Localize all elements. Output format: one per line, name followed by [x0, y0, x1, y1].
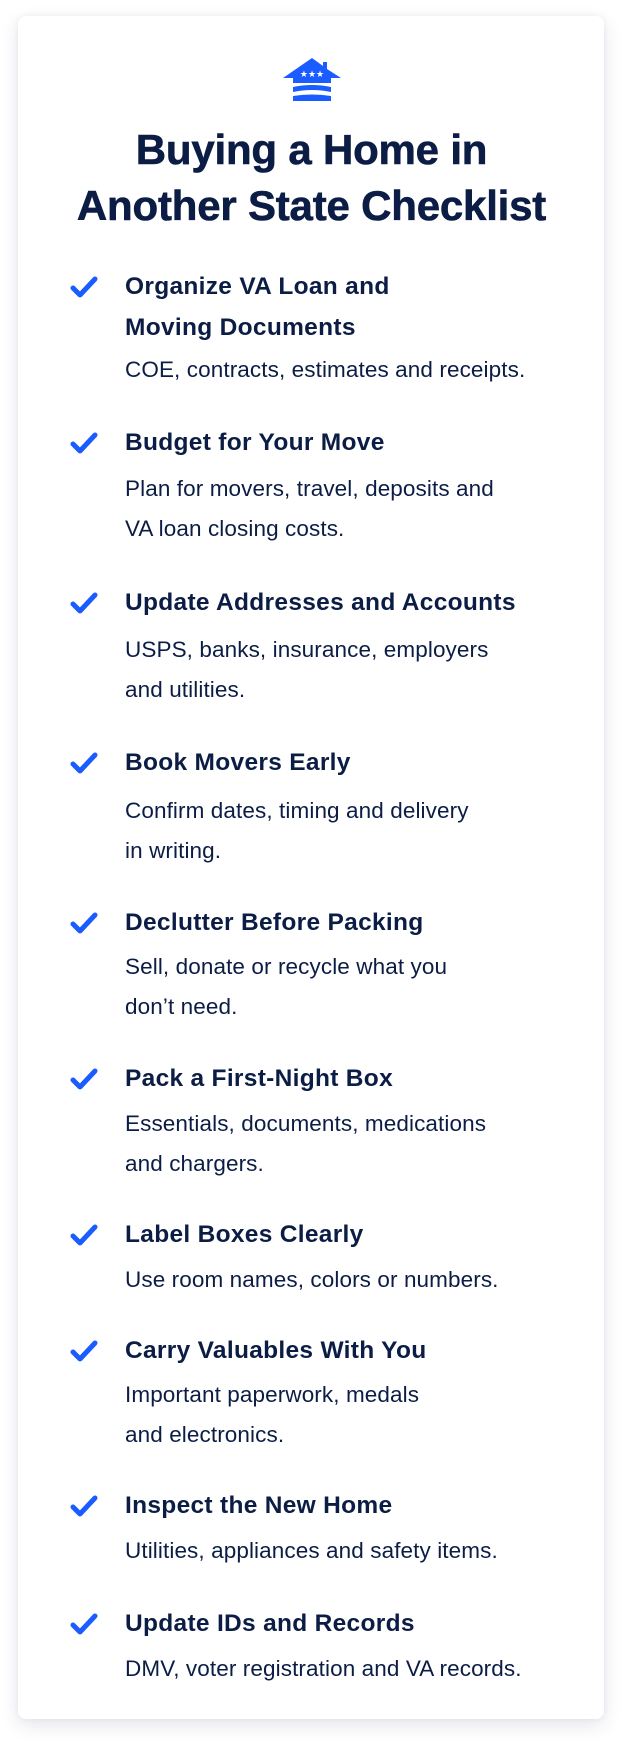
text: USPS, banks, insurance, employers: [125, 637, 488, 662]
text: and utilities.: [125, 677, 245, 702]
icon: house logo: ★★★: [300, 70, 324, 80]
item 7: [70, 1221, 499, 1292]
item 1: [70, 273, 525, 382]
item 9: [70, 1492, 498, 1563]
item 2: [70, 429, 494, 541]
text: Confirm dates, timing and delivery: [125, 798, 469, 823]
text: Update Addresses and Accounts: [125, 589, 516, 616]
item 6: [70, 1065, 486, 1176]
text: Budget for Your Move: [125, 429, 385, 456]
icon: house logo: [283, 58, 341, 101]
item 3: [70, 589, 516, 702]
item 10: [70, 1610, 522, 1681]
title: Buying a Home in: [136, 126, 487, 173]
text: and chargers.: [125, 1151, 264, 1176]
text: Pack a First-Night Box: [125, 1065, 393, 1092]
title: [77, 126, 546, 229]
text: Carry Valuables With You: [125, 1337, 427, 1364]
text: COE, contracts, estimates and receipts.: [125, 357, 525, 382]
text: Moving Documents: [125, 314, 356, 341]
text: Use room names, colors or numbers.: [125, 1267, 499, 1292]
text: Utilities, appliances and safety items.: [125, 1538, 498, 1563]
text: Plan for movers, travel, deposits and: [125, 476, 494, 501]
text: Book Movers Early: [125, 749, 351, 776]
text: DMV, voter registration and VA records.: [125, 1656, 522, 1681]
text: don’t need.: [125, 994, 237, 1019]
item 8: [70, 1337, 427, 1447]
title: Another State Checklist: [77, 182, 546, 229]
text: Inspect the New Home: [125, 1492, 392, 1519]
text: Important paperwork, medals: [125, 1382, 419, 1407]
text: VA loan closing costs.: [125, 516, 344, 541]
text: Update IDs and Records: [125, 1610, 415, 1637]
text: Declutter Before Packing: [125, 909, 424, 936]
text: in writing.: [125, 838, 221, 863]
text: and electronics.: [125, 1422, 284, 1447]
text: Label Boxes Clearly: [125, 1221, 364, 1248]
item 5: [70, 909, 447, 1019]
text: Sell, donate or recycle what you: [125, 954, 447, 979]
text: Organize VA Loan and: [125, 273, 390, 300]
text: Essentials, documents, medications: [125, 1111, 486, 1136]
item 4: [70, 749, 469, 863]
